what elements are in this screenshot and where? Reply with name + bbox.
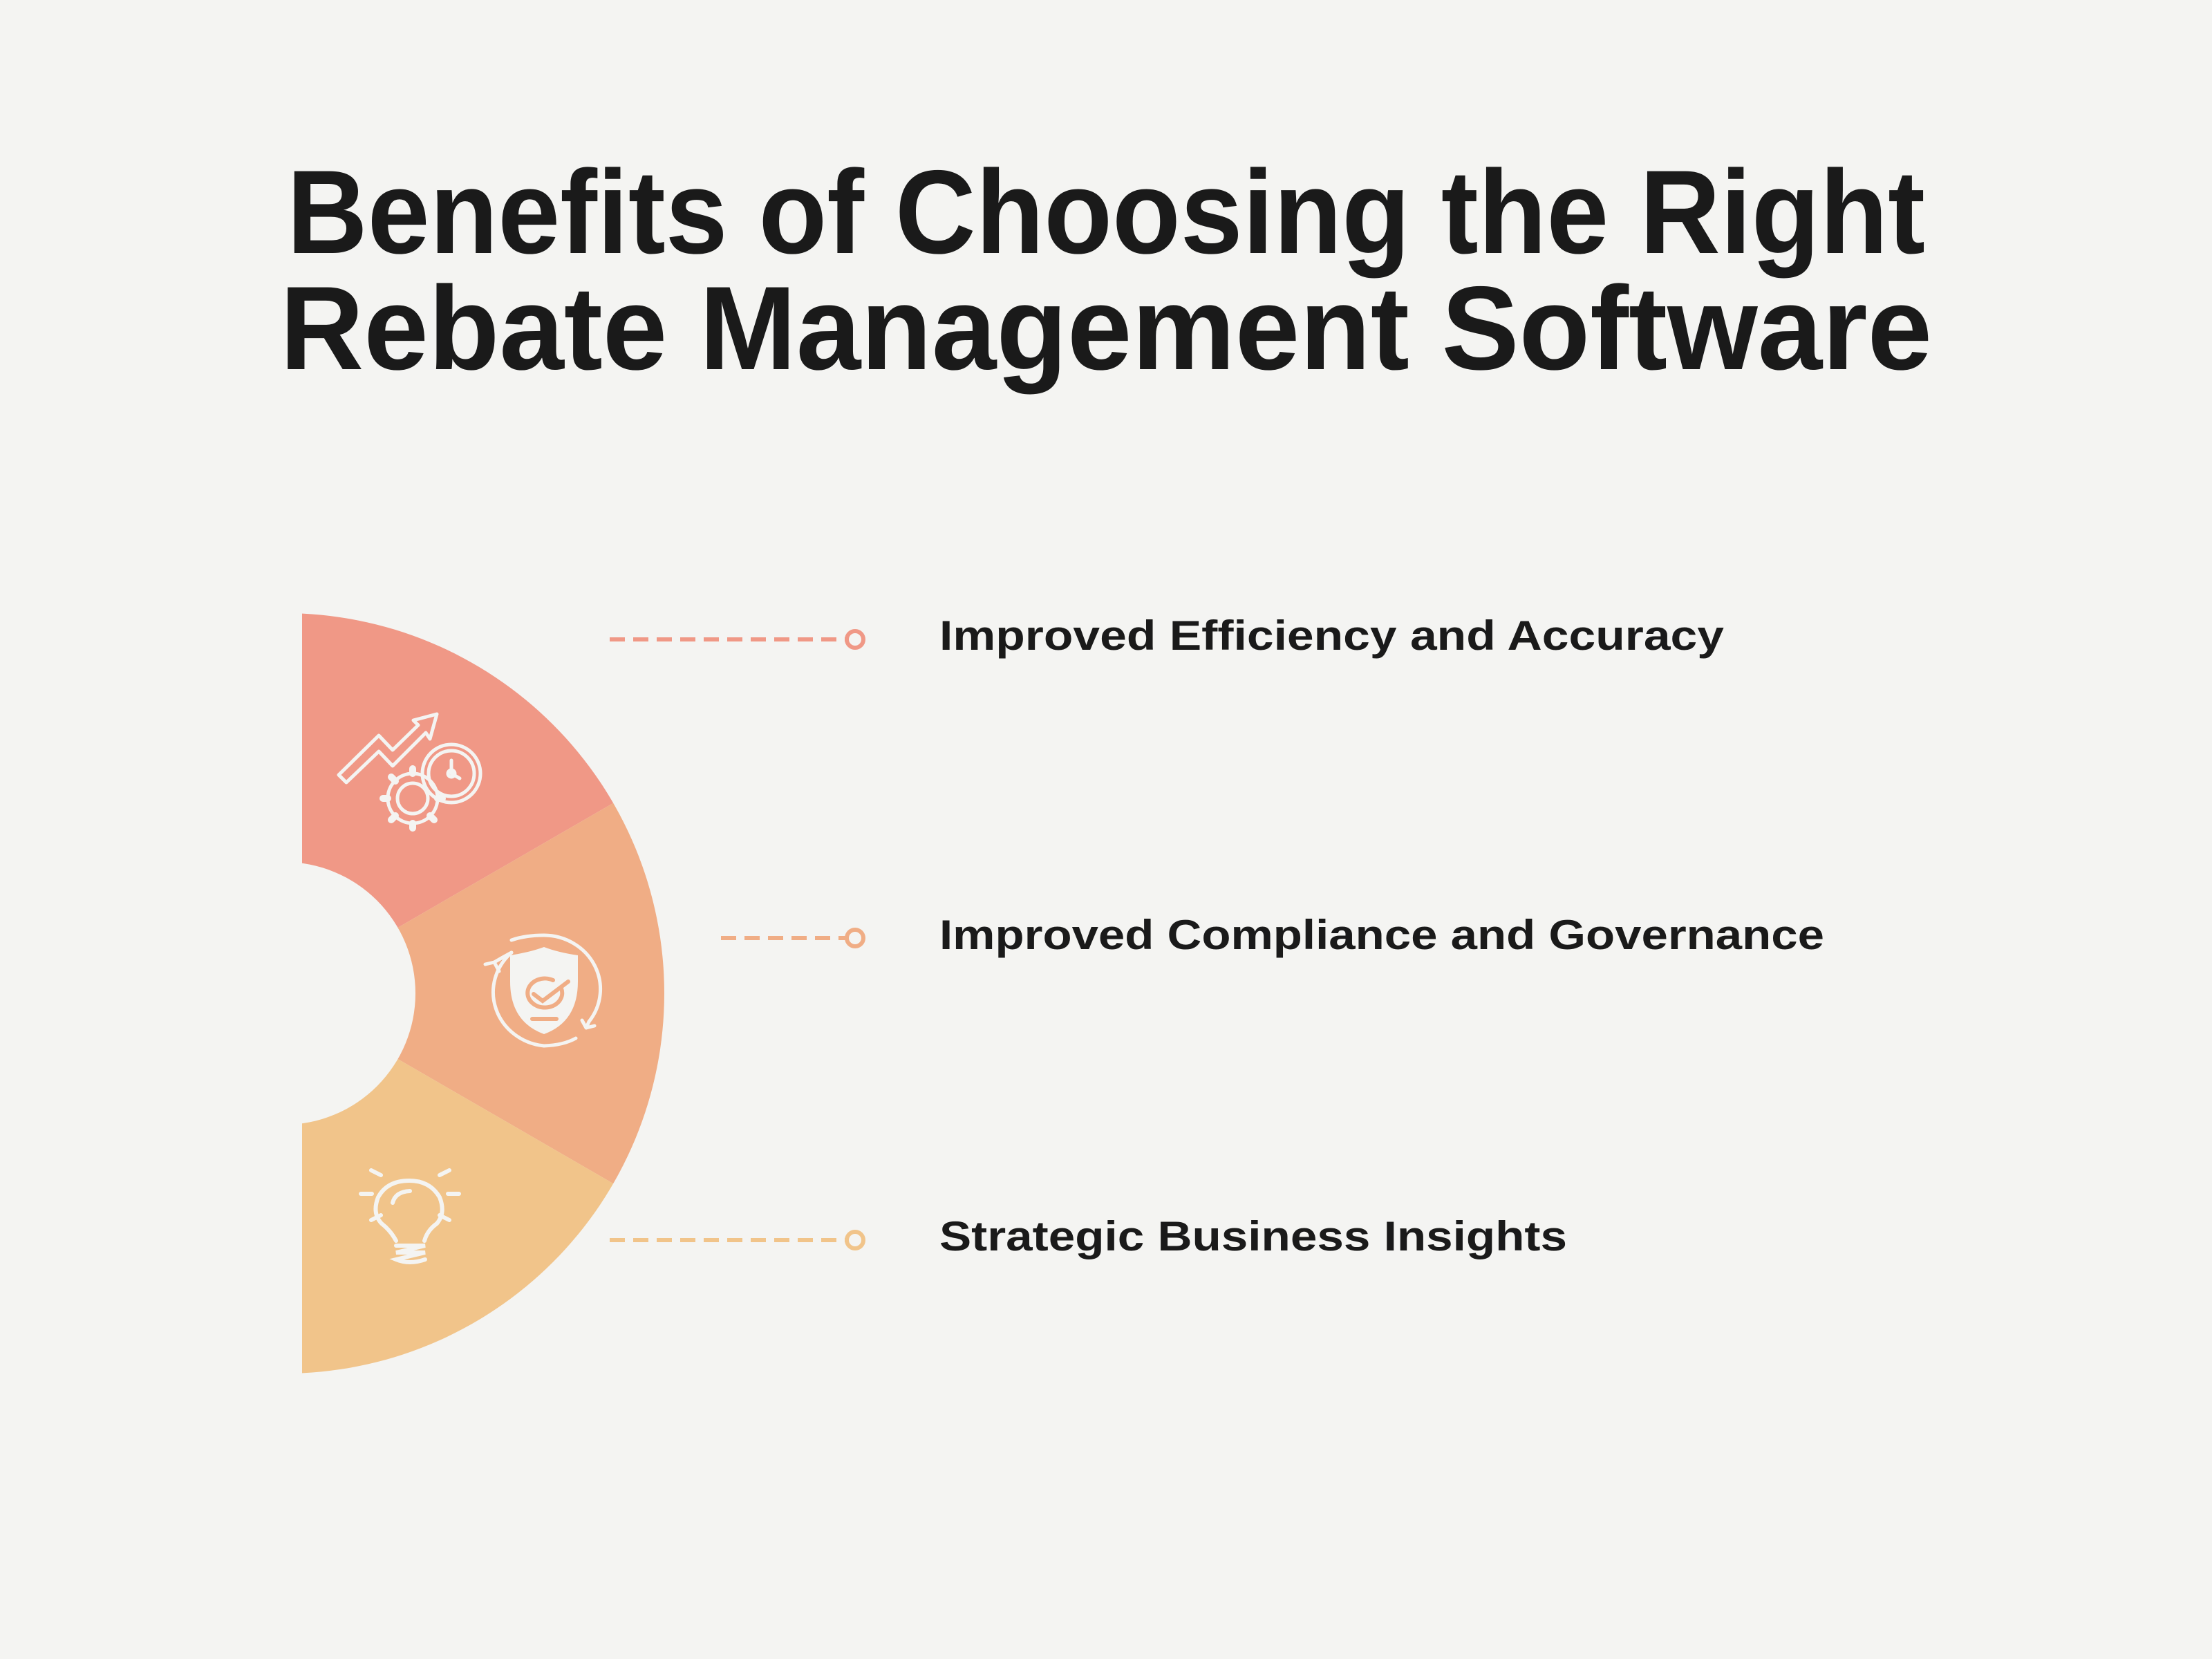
connector: insights (610, 1232, 863, 1248)
semicircle chart (302, 614, 664, 1373)
title: Rebate Management Software (280, 262, 1932, 395)
label: efficiency: Improved Efficiency and Accuracy (939, 612, 1725, 659)
label: insights: Strategic Business Insights (939, 1213, 1567, 1259)
segment: efficiency (302, 614, 614, 928)
icon: shield with check and circular arrows (485, 935, 601, 1046)
connector: compliance (721, 930, 863, 946)
title (280, 146, 1932, 395)
connector: efficiency (610, 631, 863, 648)
label: compliance: Improved Compliance and Governance (939, 912, 1824, 958)
segment: compliance (398, 803, 664, 1183)
title: Benefits of Choosing the Right (287, 146, 1925, 279)
icon: growth arrow with gear and clock (339, 714, 480, 828)
icon: light bulb (361, 1170, 459, 1262)
segment: insights (302, 1059, 614, 1373)
